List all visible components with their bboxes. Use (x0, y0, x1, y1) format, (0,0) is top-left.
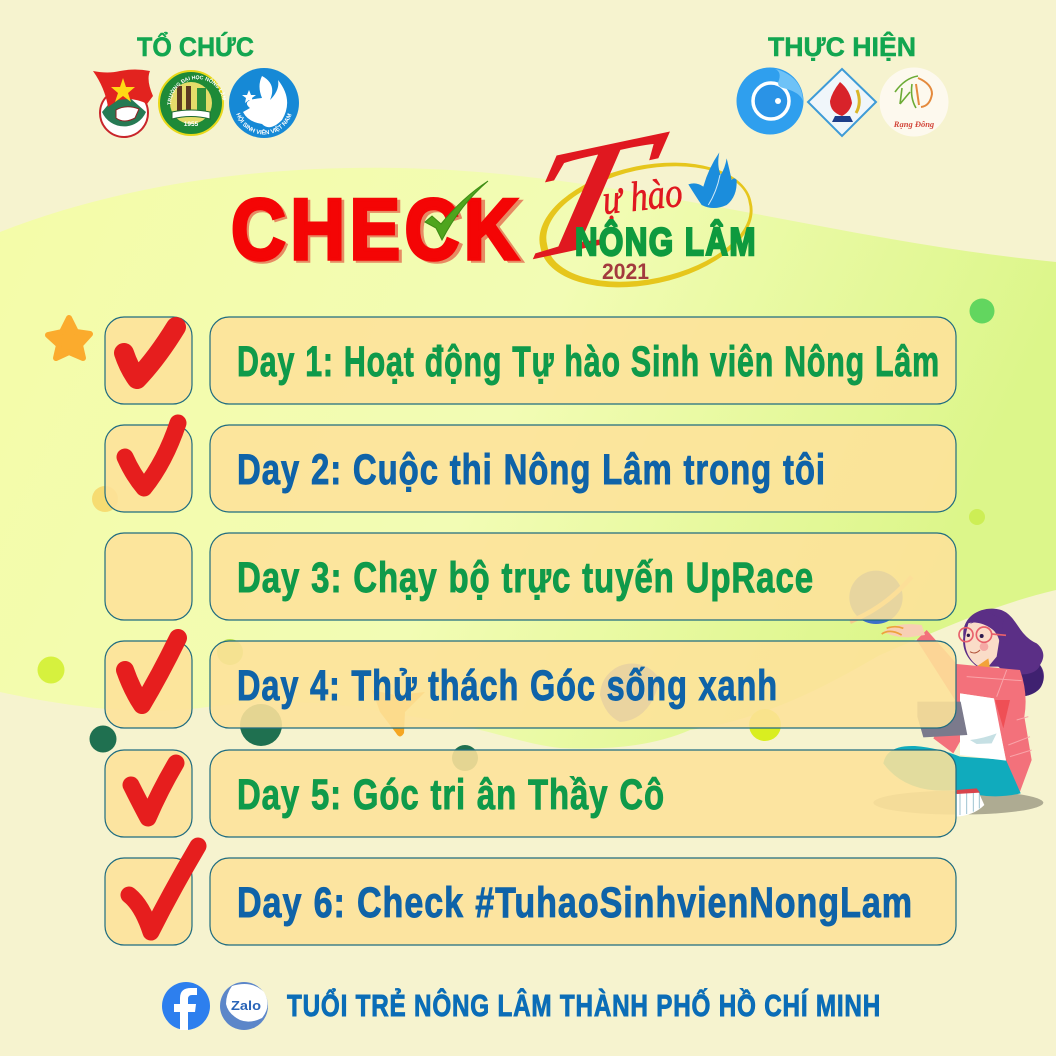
logo: Đại học Nông Lâm (158, 70, 226, 136)
logo: Tự hào Nông Lâm 2021: 2021 (602, 259, 649, 284)
icon: red check (125, 423, 178, 488)
row: Day 3: Day 3: Chạy bộ trực tuyến UpRace (237, 554, 814, 602)
row: Day 5: Day 5: Góc tri ân Thầy Cô (237, 771, 665, 819)
logo: diamond flame (808, 69, 876, 136)
icon: Zalo: Zalo (231, 998, 261, 1013)
icon: red check (125, 638, 178, 705)
logo: Rạng Đông: Rạng Đông (893, 119, 935, 129)
icon: red check (124, 327, 176, 379)
row: Day 3 (105, 533, 956, 620)
logo: Tự hào Nông Lâm 2021 (509, 96, 757, 296)
illustration: girl with planet (849, 571, 1044, 817)
row: Day 6 (105, 846, 956, 945)
heading: Thực hiện: THỰC HIỆN (768, 31, 916, 62)
logo: blue circle (736, 68, 804, 134)
logo: Hội Sinh viên Việt Nam (229, 68, 299, 138)
row: Day 2 (105, 423, 956, 512)
logo: Đại học Nông Lâm: 1955 (184, 121, 199, 128)
icon: Facebook (162, 982, 210, 1030)
row: Day 2: Day 2: Cuộc thi Nông Lâm trong tôi (237, 446, 826, 494)
logo: Đại học Nông Lâm: TRƯỜNG ĐẠI HỌC NÔNG LÂM (167, 75, 226, 105)
row: Day 4: Day 4: Thử thách Góc sống xanh (237, 662, 778, 710)
row: Day 5 (105, 750, 956, 837)
row: Day 1 (105, 317, 956, 404)
logo: Hội Sinh viên Việt Nam: HỘI SINH VIÊN VIỆT NAM (236, 112, 292, 134)
logo: Tự hào Nông Lâm 2021: T (509, 96, 677, 296)
icon: orange star (48, 318, 90, 358)
row: Day 4 (105, 638, 956, 728)
title: CHECK: CHECK (233, 184, 527, 280)
icon: blue flame dove (688, 152, 737, 208)
icon: Zalo (220, 982, 268, 1030)
icon: red check (131, 763, 176, 818)
logo: Rạng Đông (880, 68, 948, 136)
logo: Đoàn thanh niên (93, 70, 153, 137)
icon: red check (129, 846, 198, 932)
footer text: TUỔI TRẺ NÔNG LÂM THÀNH PHỐ HỒ CHÍ MINH (287, 987, 881, 1023)
decorative shapes (38, 298, 994, 771)
title: CHECK: CHECK (231, 182, 523, 278)
logo: Tự hào Nông Lâm 2021: ự hào (600, 170, 685, 224)
heading: Tổ chức: TỔ CHỨC (137, 31, 254, 62)
logo: Tự hào Nông Lâm 2021: NÔNG LÂM (575, 219, 757, 264)
icon: green check mark (425, 181, 488, 240)
